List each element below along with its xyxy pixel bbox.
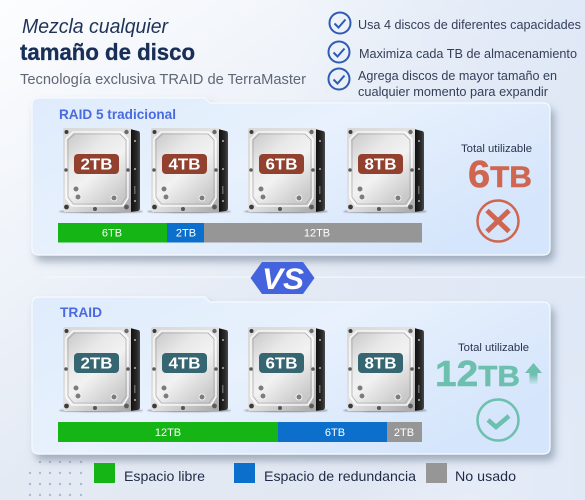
feature: different capacities <box>330 12 581 34</box>
VS badge: VS <box>262 263 304 296</box>
legend item: free space: Espacio libre <box>124 468 205 484</box>
capacity bar: 6TB <box>325 427 345 439</box>
total usable label: Total utilizable <box>458 342 529 354</box>
legend item: redundancy space <box>234 463 416 484</box>
title <box>20 16 195 65</box>
drive: 6TB <box>244 327 328 412</box>
legend <box>94 463 516 484</box>
feature: expand any time: Agrega discos de mayor tamaño en <box>358 68 557 83</box>
icon: cross <box>478 200 518 242</box>
capacity bar: 12TB <box>155 427 181 439</box>
drive: 8TB <box>343 327 427 412</box>
total value: 12TB: 12TB <box>435 353 520 394</box>
legend item: unused: No usado <box>455 468 516 484</box>
drive: 8TB <box>343 128 427 213</box>
drive: 4TB <box>147 128 231 213</box>
title: tamaño de disco <box>20 39 195 65</box>
capacity bar: 2TB <box>176 228 196 240</box>
capacity bar: 6TB <box>102 228 122 240</box>
feature: expand any time <box>328 68 557 99</box>
drive: 6TB: 6TB <box>266 356 298 372</box>
feature: different capacities: Usa 4 discos de diferentes capacidades <box>358 17 581 32</box>
capacity bar: 12TB <box>304 228 330 240</box>
panel heading: RAID 5 tradicional <box>59 106 176 122</box>
feature: expand any time: cualquier momento para expandir <box>358 84 549 99</box>
legend item: free space <box>94 463 205 484</box>
drive: 4TB <box>147 327 231 412</box>
icon: check <box>478 400 518 440</box>
title: Mezcla cualquier <box>22 16 169 38</box>
icon: up arrow <box>525 363 542 384</box>
drive: 8TB: 8TB <box>364 356 396 372</box>
drive: 2TB: 2TB <box>80 356 112 372</box>
subtitle: Tecnología exclusiva TRAID de TerraMaster <box>20 72 306 88</box>
panel: RAID 5 tradicional <box>32 98 550 255</box>
drive: 4TB: 4TB <box>168 156 200 174</box>
feature list <box>328 12 581 99</box>
drive: 8TB: 8TB <box>364 156 396 174</box>
capacity bar <box>58 223 422 242</box>
feature: maximize storage <box>328 42 577 62</box>
drive: 2TB: 2TB <box>80 156 112 174</box>
background dot pattern <box>29 461 82 496</box>
capacity bar: 2TB <box>394 427 414 439</box>
feature: maximize storage: Maximiza cada TB de almacenamiento <box>359 46 577 61</box>
panel: TRAID <box>32 297 550 454</box>
legend item: unused <box>426 463 516 484</box>
total usable label: Total utilizable <box>461 143 532 155</box>
total value: 6TB: 6TB <box>468 154 532 196</box>
drive: 6TB: 6TB <box>266 156 298 174</box>
VS badge <box>250 262 314 296</box>
capacity bar <box>58 422 422 442</box>
panel heading: TRAID <box>60 304 102 320</box>
legend item: redundancy space: Espacio de redundancia <box>264 468 416 484</box>
drive: 2TB <box>59 327 143 412</box>
drive: 2TB <box>59 128 143 213</box>
drive: 6TB <box>244 128 328 213</box>
drive: 4TB: 4TB <box>168 356 200 372</box>
